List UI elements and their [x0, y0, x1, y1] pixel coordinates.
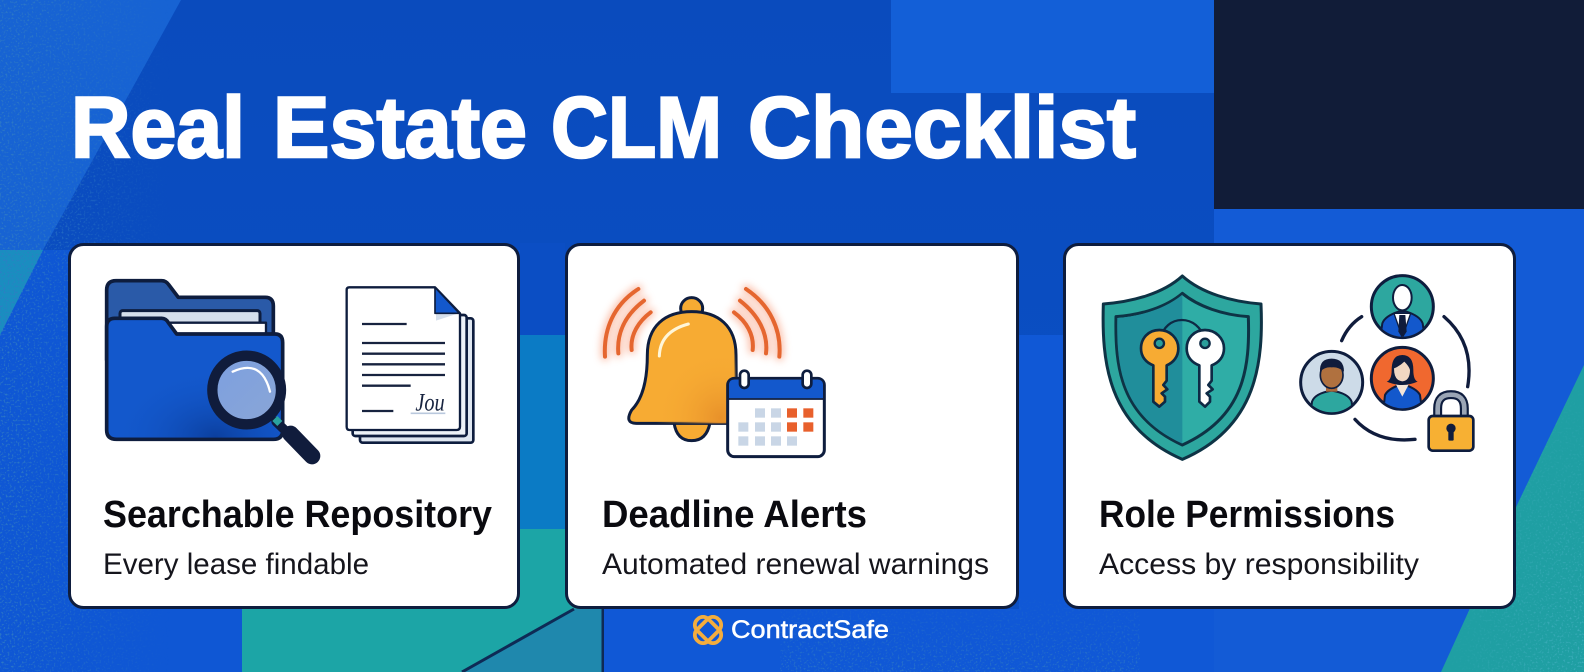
title: Estate [273, 80, 527, 176]
panel: deadline alerts [566, 244, 1018, 608]
person: manager [1371, 276, 1433, 340]
icon: ringing bell with calendar [605, 289, 824, 457]
person: staff [1301, 351, 1363, 413]
icon: shield with keys [1103, 276, 1261, 459]
title: CLM [551, 80, 722, 176]
icon: logo mark [692, 614, 724, 646]
title [71, 80, 1136, 176]
logo: ContractSafe [692, 614, 889, 646]
icon: team roles with lock [1301, 276, 1473, 451]
panel: role permissions [1064, 244, 1514, 608]
subtext: every lease findable: Every lease findable [103, 548, 369, 581]
person: manager in orange [1371, 347, 1433, 410]
subtext: automated renewal warnings: Automated renewal warnings [602, 548, 989, 581]
subtext: access by responsibility: Access by responsibility [1099, 548, 1419, 581]
icon: signed document stack: Jou [415, 389, 445, 417]
lock [1429, 395, 1473, 451]
heading: searchable repository: Searchable Repository [103, 494, 492, 536]
heading: role permissions: Role Permissions [1099, 494, 1395, 536]
icon: signed document stack [347, 287, 473, 443]
wordmark: ContractSafe [731, 616, 889, 644]
icon: folder with magnifying glass [107, 281, 312, 456]
title: Checklist [748, 80, 1136, 176]
panel: searchable repository [70, 244, 518, 608]
heading: deadline alerts: Deadline Alerts [602, 494, 867, 536]
title: Real [71, 80, 245, 176]
